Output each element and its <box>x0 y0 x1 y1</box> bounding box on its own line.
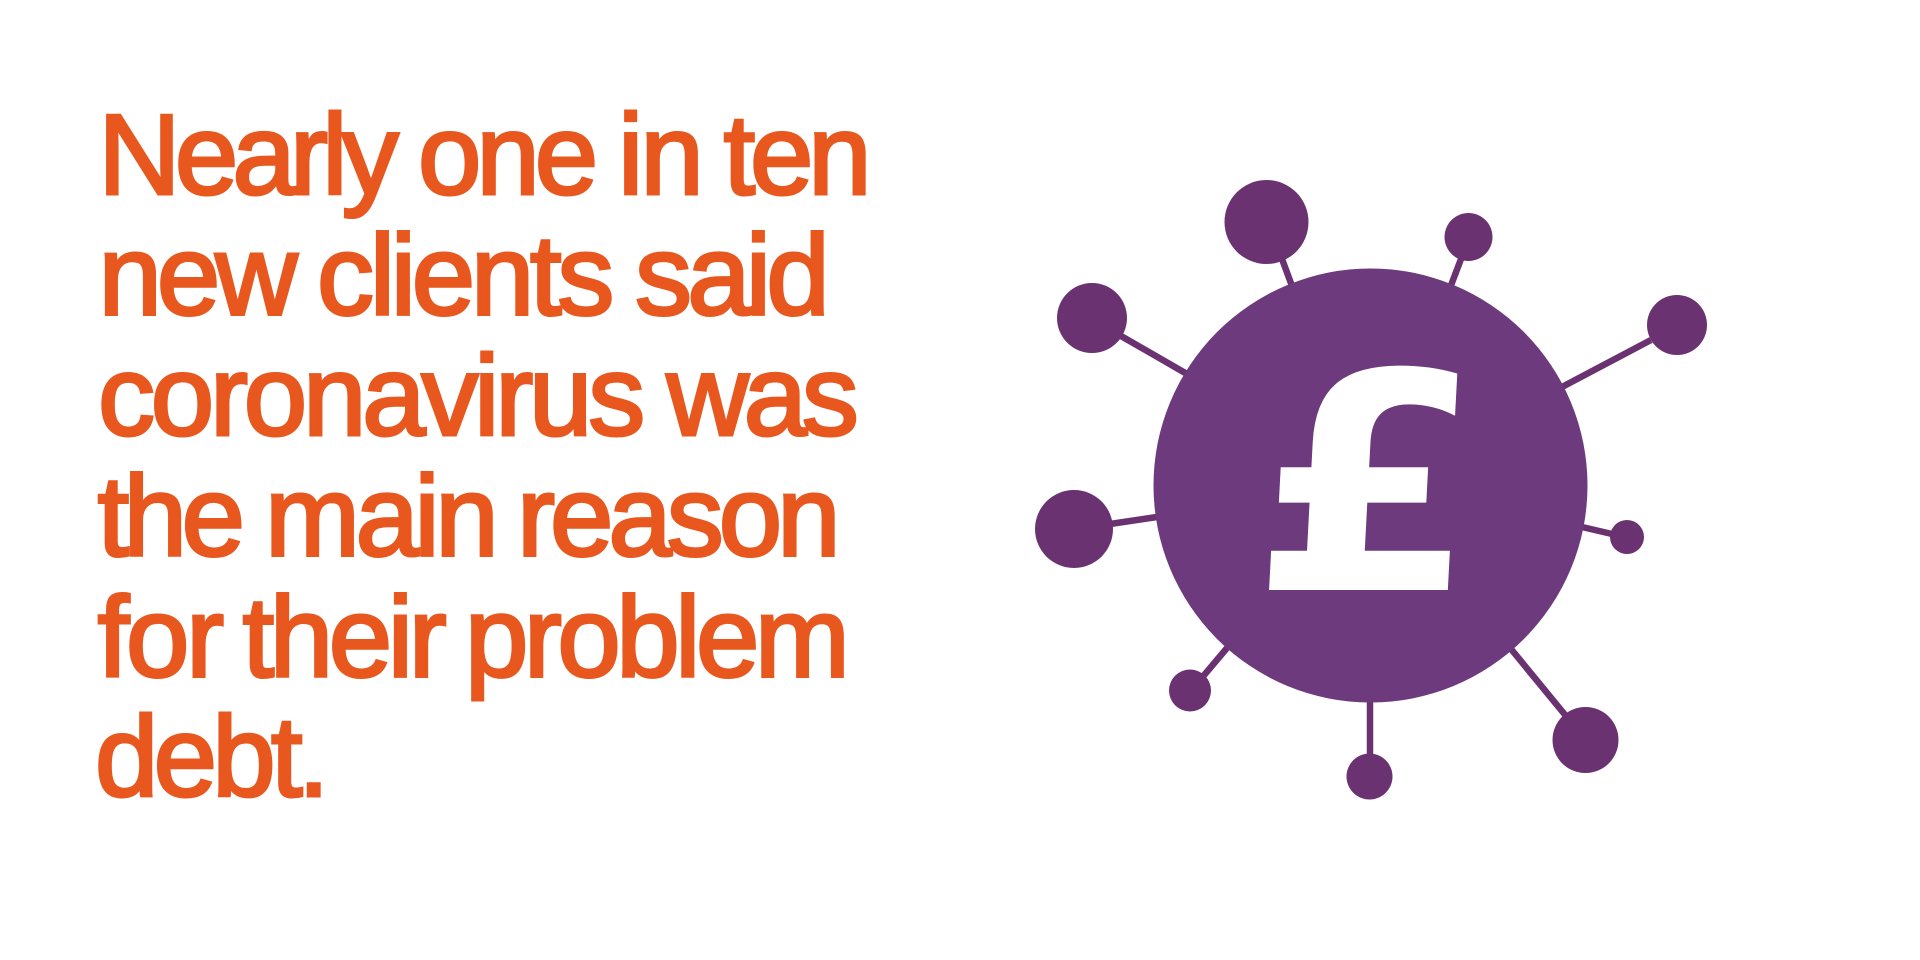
virus body <box>1154 268 1588 702</box>
headline text block: the <box>98 454 241 580</box>
headline text block: said <box>635 212 825 340</box>
headline text block: coronavirus <box>98 333 641 460</box>
virus bubbles <box>1035 180 1707 800</box>
headline text block: problem <box>465 574 845 702</box>
headline text block: in <box>618 92 701 219</box>
headline text block: debt. <box>95 694 325 821</box>
headline text block: reason <box>517 454 836 580</box>
headline text block: new <box>98 212 298 340</box>
headline text block: for <box>98 574 223 702</box>
headline text block: main <box>265 454 494 580</box>
headline text block: one <box>418 92 594 219</box>
headline text block: clients <box>317 212 610 340</box>
headline text block: their <box>242 574 446 702</box>
virus spokes <box>1110 259 1651 757</box>
pound sign: £ <box>1246 309 1489 661</box>
headline text block: was <box>666 333 855 460</box>
headline text block: ten <box>724 92 866 219</box>
icon: coronavirus with pound sign <box>1035 180 1707 800</box>
headline text block <box>95 92 866 821</box>
headline text block: Nearly <box>98 92 399 219</box>
